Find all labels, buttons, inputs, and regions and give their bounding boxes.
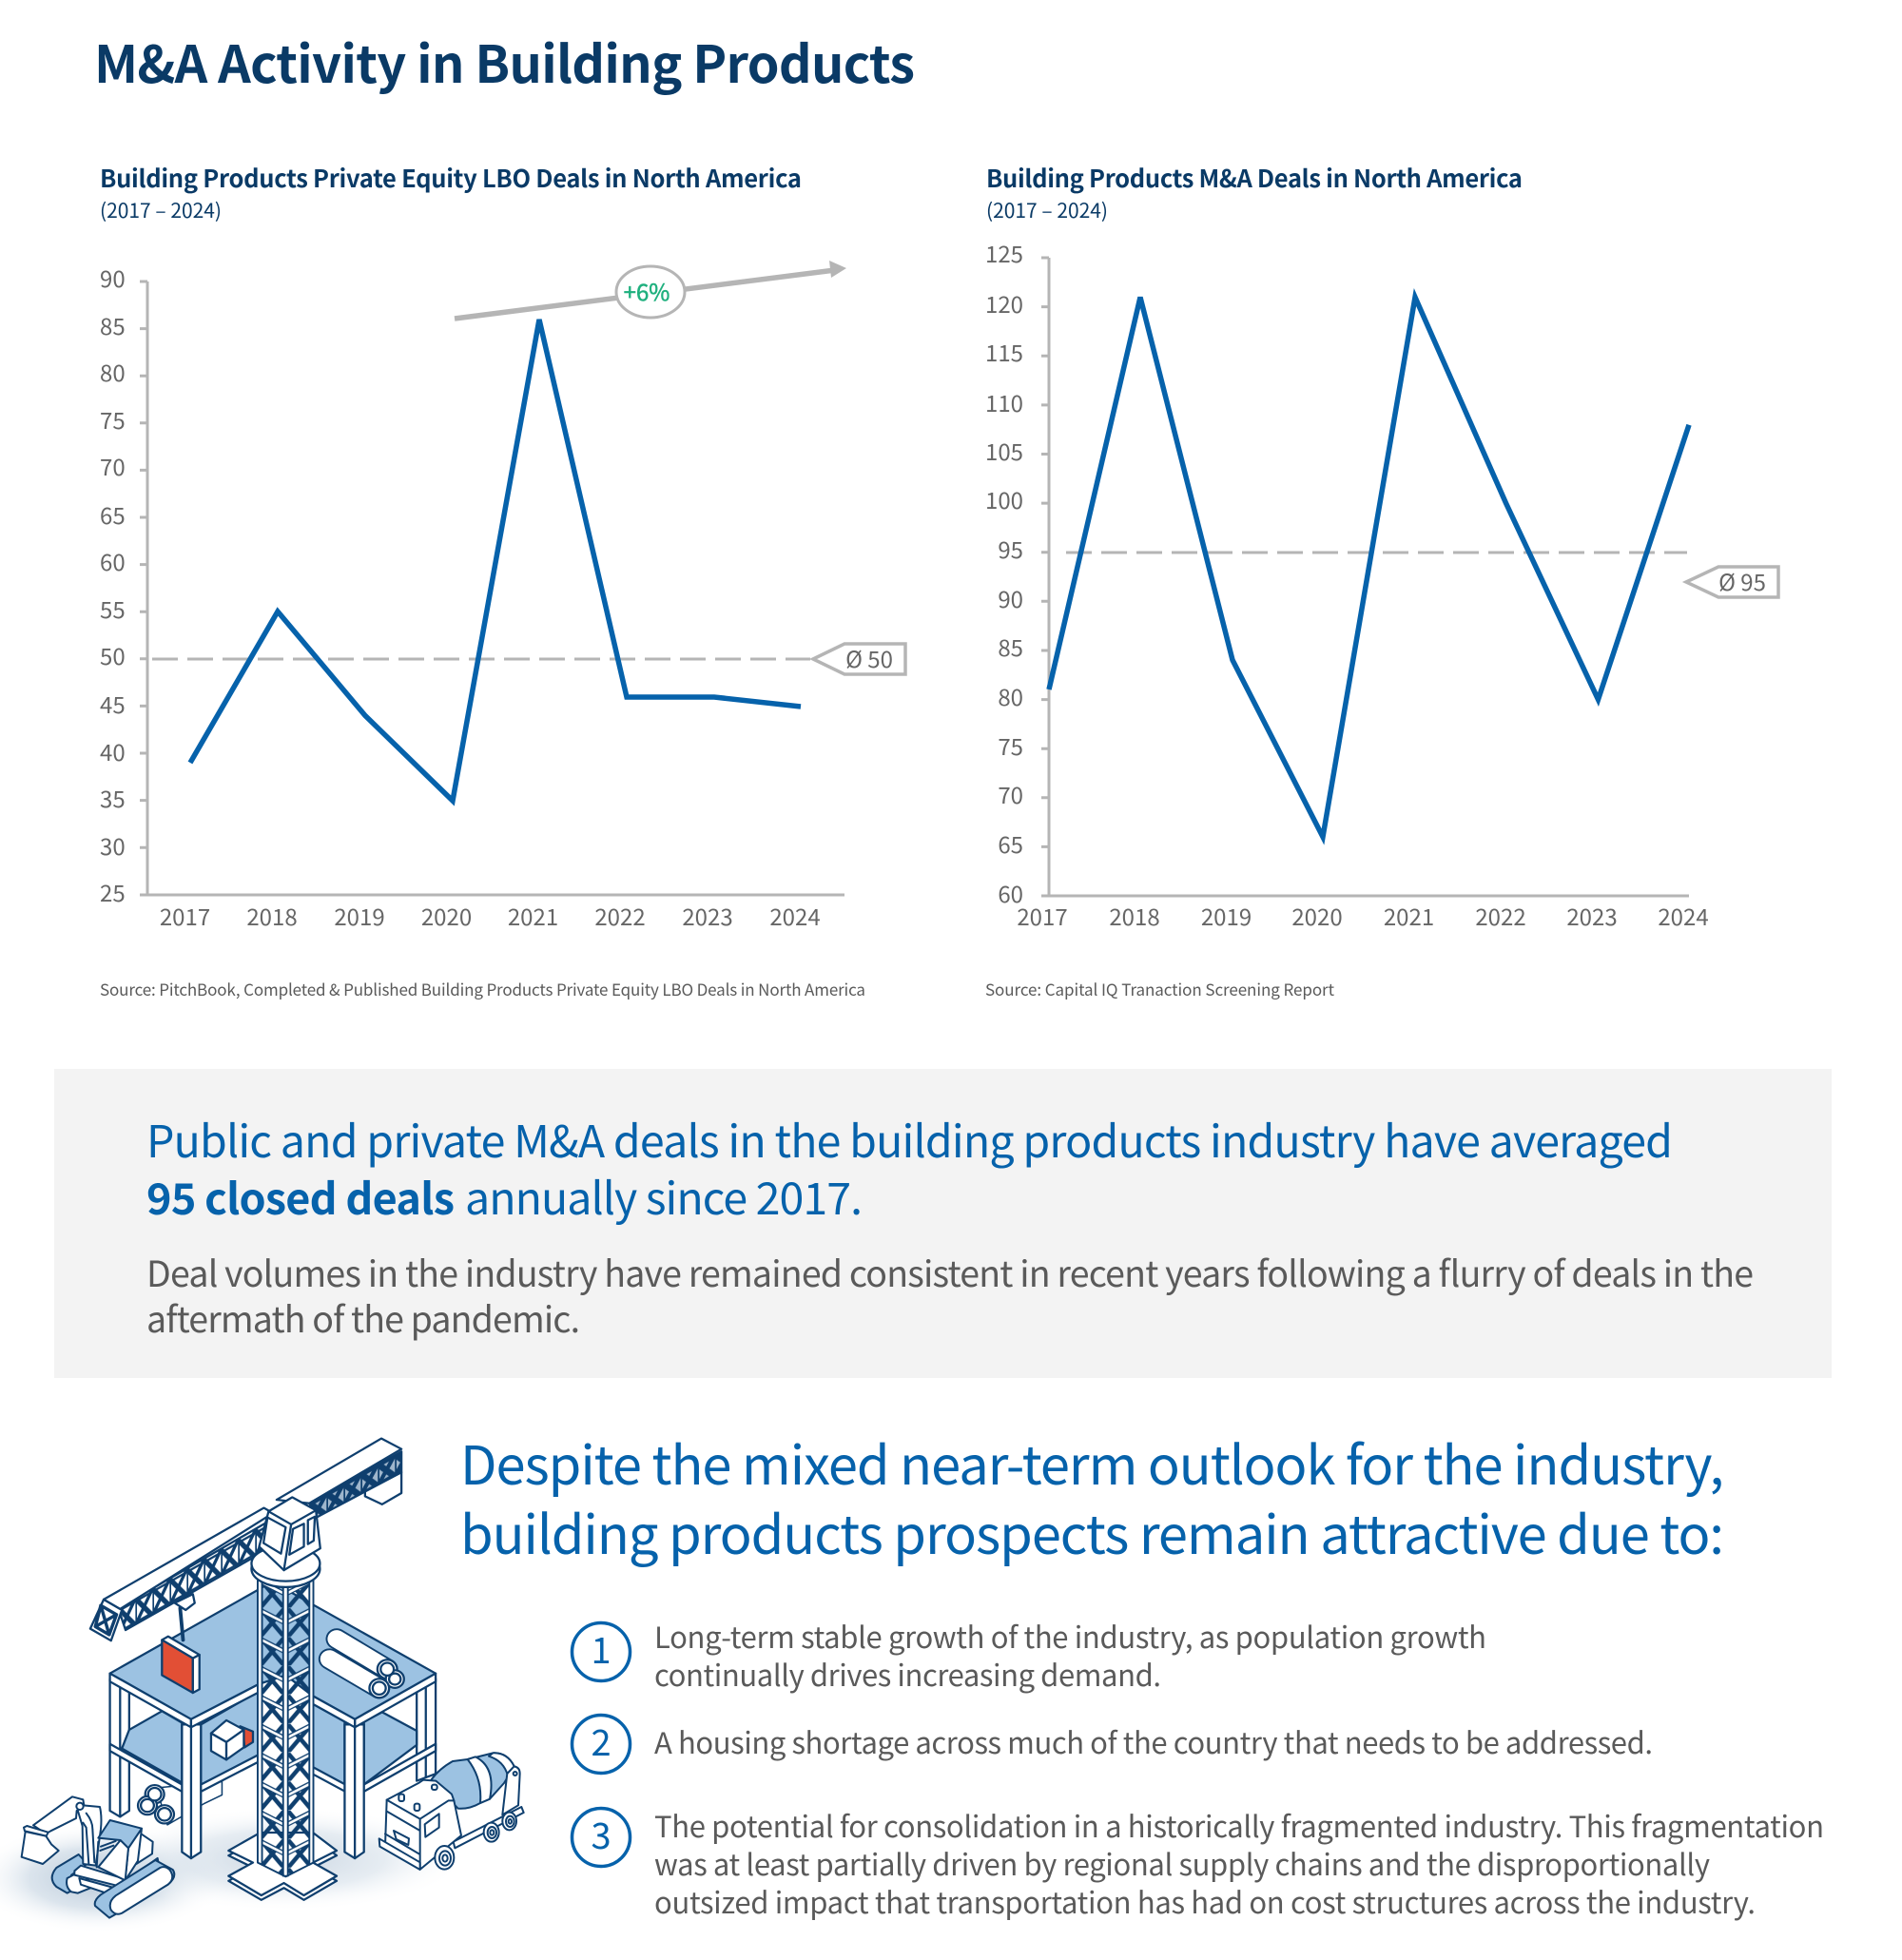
source note: Source: PitchBook, Completed & Published Building Products Private Equity LBO Deals in North America [100,977,865,1000]
list item 1: continually drives increasing demand. [654,1652,1161,1695]
x axis labels: 2017 [160,899,210,932]
x axis labels: 2021 [1384,899,1434,932]
takeaway headline line 1: Public and private M&A deals in the building products industry have averaged [146,1107,1673,1171]
list item 2 [573,1714,1653,1773]
y axis labels: 55 [100,592,126,625]
takeaway headline line 2 [146,1164,863,1228]
takeaway headline line 2: annually since 2017. [465,1164,863,1228]
x axis labels: 2018 [1109,899,1160,932]
outlook headline: Despite the mixed near-term outlook for the industry, [460,1424,1724,1501]
x axis labels: 2021 [508,899,558,932]
top floor slab [110,1582,436,1727]
outlook headline [460,1424,1724,1570]
x axis labels: 2020 [1291,899,1343,932]
x axis labels [160,899,821,932]
average tag: Ø 95 [1718,564,1766,597]
cab front [98,1840,128,1880]
list item 2: A housing shortage across much of the country that needs to be addressed. [654,1719,1653,1762]
y axis labels [985,236,1023,909]
x axis labels [1017,899,1709,932]
y axis labels: 85 [100,308,126,341]
y axis labels: 95 [998,532,1023,565]
chart date range: (2017 – 2024) [986,196,1108,224]
chart date range: (2017 – 2024) [100,196,222,224]
y axis labels: 90 [998,581,1023,614]
average line [1066,552,1687,553]
title: M&A Activity in Building Products [94,23,915,98]
y axis labels: 105 [985,434,1023,467]
list item 1 [573,1614,1486,1695]
rear wheels [484,1813,516,1842]
data line [190,320,801,801]
list item 3: was at least partially driven by regional supply chains and the disproportionally [654,1841,1710,1884]
chart heading: Building Products Private Equity LBO Deals in North America [100,160,802,195]
list item 3: The potential for consolidation in a historically fragmented industry. This fragmentation [654,1803,1824,1846]
axes [140,281,844,895]
x axis labels: 2022 [1475,899,1526,932]
panel: M&A deals chart [985,160,1778,1000]
y axis labels: 70 [998,777,1023,810]
y axis labels: 75 [100,402,126,436]
x axis labels: 2019 [334,899,385,932]
ground shadows [0,1807,466,1933]
x axis labels: 2024 [1658,899,1709,932]
tower mast [258,1573,314,1876]
rear track [52,1854,87,1893]
list item 3 [573,1803,1824,1922]
source note: Source: Capital IQ Tranaction Screening Report [985,977,1335,1000]
arm [33,1796,84,1834]
average tag [1686,564,1778,597]
cab roof [98,1820,142,1848]
middle floor [110,1691,436,1796]
x axis labels: 2018 [246,899,298,932]
outlook headline: building products prospects remain attractive due to: [460,1493,1724,1570]
trend arrow with growth badge [455,261,846,319]
undercarriage [74,1858,159,1888]
cement mixer truck [379,1753,524,1870]
y axis labels: 110 [985,385,1023,418]
x axis labels: 2024 [769,899,821,932]
y axis labels: 60 [998,876,1023,909]
illustration: isometric construction site [0,1439,524,1933]
data line [1049,297,1689,837]
panel: key takeaway [54,1069,1832,1378]
y axis labels: 90 [100,261,126,294]
y axis labels: 85 [998,630,1023,663]
y axis labels: 100 [985,482,1023,515]
takeaway body: Deal volumes in the industry have remained consistent in recent years following a flurry of deals in the [146,1245,1754,1297]
y axis labels: 80 [998,679,1023,712]
x axis labels: 2022 [594,899,646,932]
average tag [813,641,905,674]
list item 3: outsized impact that transportation has had on cost structures across the industry. [654,1879,1756,1922]
y axis labels: 45 [100,687,126,720]
x axis labels: 2023 [682,899,733,932]
y axis labels: 70 [100,449,126,482]
cab roof vents [398,1785,437,1811]
y axis labels: 65 [100,497,126,531]
x axis labels: 2017 [1017,899,1068,932]
trend arrow with growth badge: +6% [624,274,670,307]
panel: private equity LBO deals chart [100,160,905,1000]
cab side [126,1829,142,1880]
front wheel [435,1846,454,1870]
tower base [228,1833,337,1900]
engine box [136,1834,153,1864]
x axis labels: 2020 [421,899,472,932]
average tag: Ø 50 [845,641,893,674]
chart heading: Building Products M&A Deals in North America [986,160,1523,195]
building and tower crane [90,1439,436,1900]
left jib [90,1508,273,1640]
y axis labels: 40 [100,734,126,767]
bumper [379,1838,420,1870]
y axis labels [100,261,126,908]
y axis labels: 25 [100,875,126,908]
excavator [22,1796,174,1918]
back columns [110,1679,436,1816]
crane cab [259,1497,320,1570]
lower pipes [138,1781,222,1825]
x axis labels: 2019 [1201,899,1252,932]
slewing ring [251,1546,320,1587]
takeaway body: aftermath of the pandemic. [146,1290,580,1343]
takeaway body [146,1245,1754,1343]
chassis [454,1807,524,1848]
bucket [22,1832,59,1864]
average line [152,658,810,660]
mixer support [502,1766,520,1814]
y axis labels: 125 [985,236,1023,269]
list item 2: 2 [591,1714,611,1766]
y axis labels: 60 [100,544,126,577]
front track [95,1860,174,1918]
white cube and red block [211,1720,253,1759]
boom [78,1805,101,1866]
front columns [182,1724,364,1858]
list item 1: 1 [591,1621,611,1674]
hanging red panel [162,1594,200,1693]
y axis labels: 80 [100,355,126,388]
y axis labels: 115 [985,335,1023,368]
stacked pipes on slab [329,1639,404,1698]
x axis labels: 2023 [1566,899,1618,932]
truck cab [385,1780,461,1869]
list item 3: 3 [591,1807,611,1859]
y axis labels: 65 [998,826,1023,860]
y axis labels: 30 [100,828,126,862]
y axis labels: 35 [100,781,126,814]
y axis labels: 50 [100,638,126,671]
mixer drum [431,1753,514,1809]
y axis labels: 120 [985,286,1023,320]
right jib [277,1439,401,1518]
list item 1: Long-term stable growth of the industry, as population growth [654,1614,1486,1657]
y axis labels: 75 [998,728,1023,762]
axes [1041,258,1689,896]
takeaway headline line 2: 95 closed deals [146,1165,455,1227]
